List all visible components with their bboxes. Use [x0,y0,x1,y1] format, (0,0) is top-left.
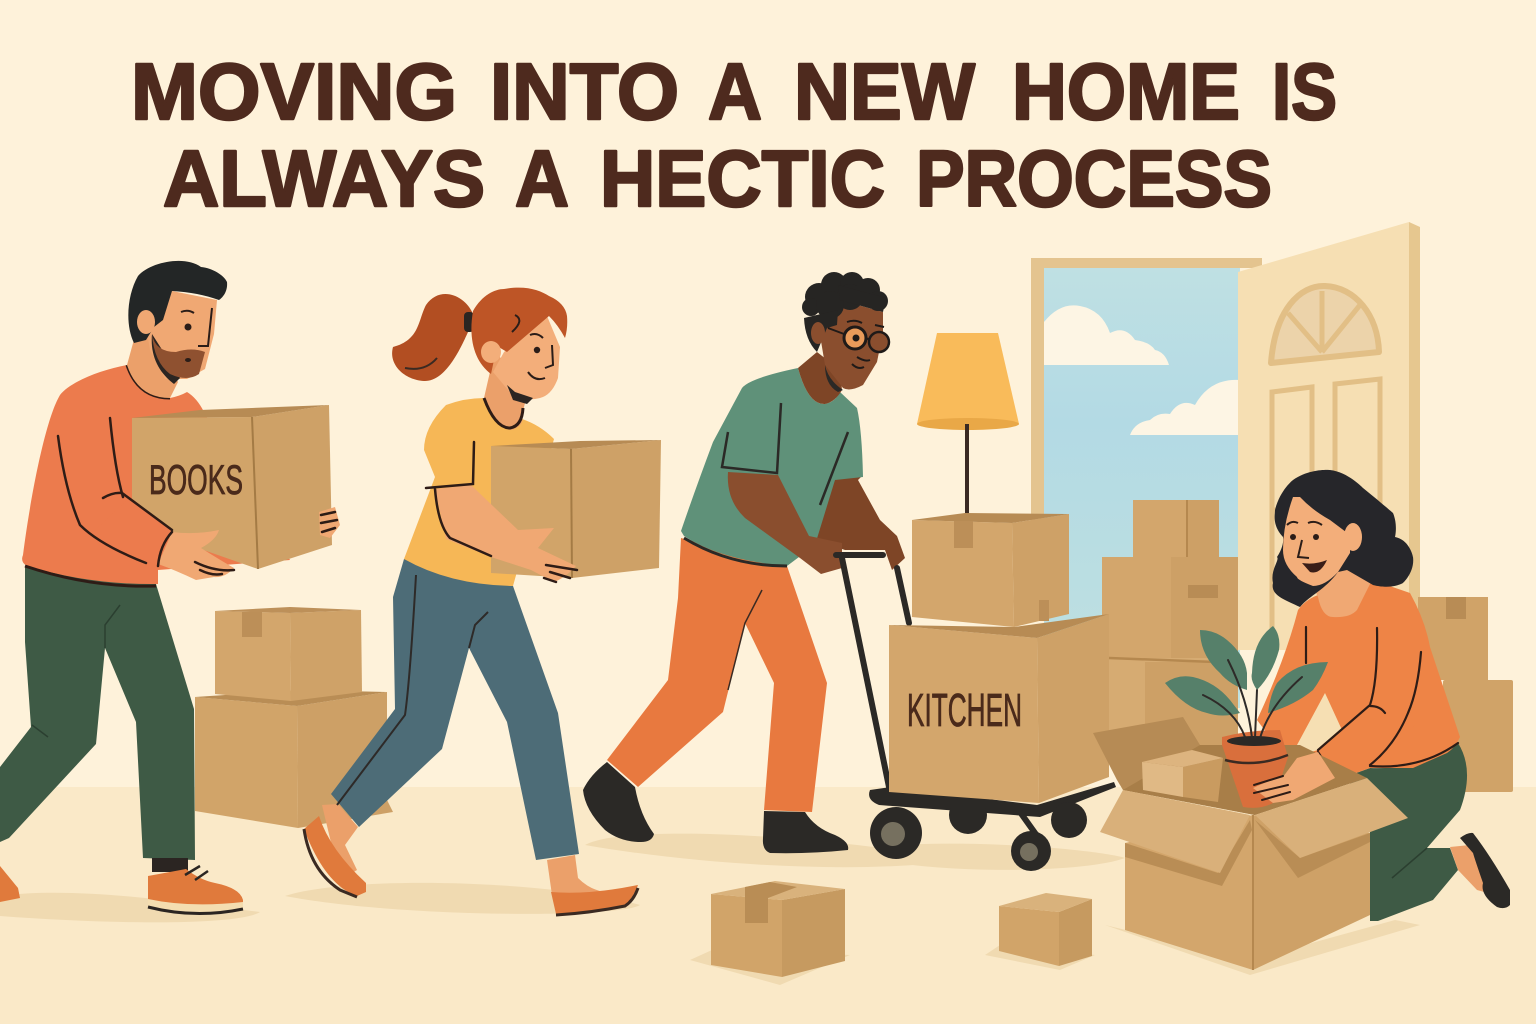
shirt [404,398,554,586]
plant pot [1222,730,1288,808]
neck [1310,553,1372,617]
box on cart [912,513,1069,627]
trousers [607,538,827,812]
BOOKS box: BOOKS [149,456,243,503]
person: kneeling woman [1257,470,1510,921]
back foot [304,804,366,897]
person: man with beard carrying BOOKS box [0,261,340,914]
small box inside [1142,750,1223,802]
box body [1125,815,1253,970]
boxes behind kneeling woman [1418,597,1513,792]
wheels [870,796,1087,871]
title line 1 [131,47,1337,136]
hand truck cart [836,555,1116,871]
trousers [0,566,195,860]
cloud upper [1044,305,1169,365]
title line 1: A [708,47,762,136]
title line 2: PROCESS [916,134,1272,223]
title [131,47,1337,223]
trousers [1345,743,1467,921]
title line 2 [163,134,1272,223]
open door leaf [1238,222,1409,650]
gap between arm and body [1290,693,1342,758]
BOOKS box [132,405,332,569]
doorway with sky and open door [1031,222,1420,708]
title line 1: HOME [1012,47,1240,136]
box stack by the door [1102,500,1238,760]
floor shadows [0,834,1420,985]
small plain box on floor [999,893,1092,966]
back flap [1093,717,1270,815]
title line 1: MOVING [131,47,457,136]
box interior [1123,745,1367,815]
floor [0,787,1536,1024]
title line 2: ALWAYS [163,134,485,223]
back arm [815,434,905,570]
box [491,440,661,578]
plant stems [1203,660,1302,738]
arm and hand [426,442,577,582]
front arm [728,472,842,574]
plant leaves [1165,626,1328,716]
sleeve lines [722,403,848,505]
shadows under flaps [1125,820,1252,886]
person: man with glasses pushing cart [583,272,905,853]
sweater [1257,580,1460,778]
foot [1450,845,1488,893]
box stack behind first man [195,607,393,828]
title line 2: A [515,134,569,223]
person: woman with ponytail carrying box [304,288,661,915]
head [798,272,889,404]
title line 2: HECTIC [600,134,885,223]
neck and head [127,261,227,398]
box flaps [1100,790,1250,873]
arm and hands [58,418,340,580]
shoes [0,858,243,914]
title line 1: NEW [794,47,975,136]
front foot [547,855,638,915]
lamp [917,333,1019,516]
t-shirt [681,368,863,566]
trousers [331,559,579,860]
sweater lines [1306,627,1458,778]
open cardboard box with plant [1093,626,1408,970]
small taped box on floor [711,881,845,977]
sweater [22,365,290,584]
sweater front arm [1318,707,1420,778]
hand on pot [1253,752,1335,803]
shoes [583,762,848,853]
KITCHEN box [889,614,1109,803]
head and ponytail [392,288,567,430]
door panels [1272,379,1380,510]
cloud lower [1130,380,1240,435]
sky through doorway [1044,268,1240,708]
door edge [1409,222,1420,620]
KITCHEN box: KITCHEN [907,684,1022,736]
title line 1: IS [1272,47,1337,136]
door frame [1031,258,1262,610]
hair and face [1272,470,1413,607]
title line 1: INTO [490,47,679,136]
door fan window [1271,286,1379,363]
